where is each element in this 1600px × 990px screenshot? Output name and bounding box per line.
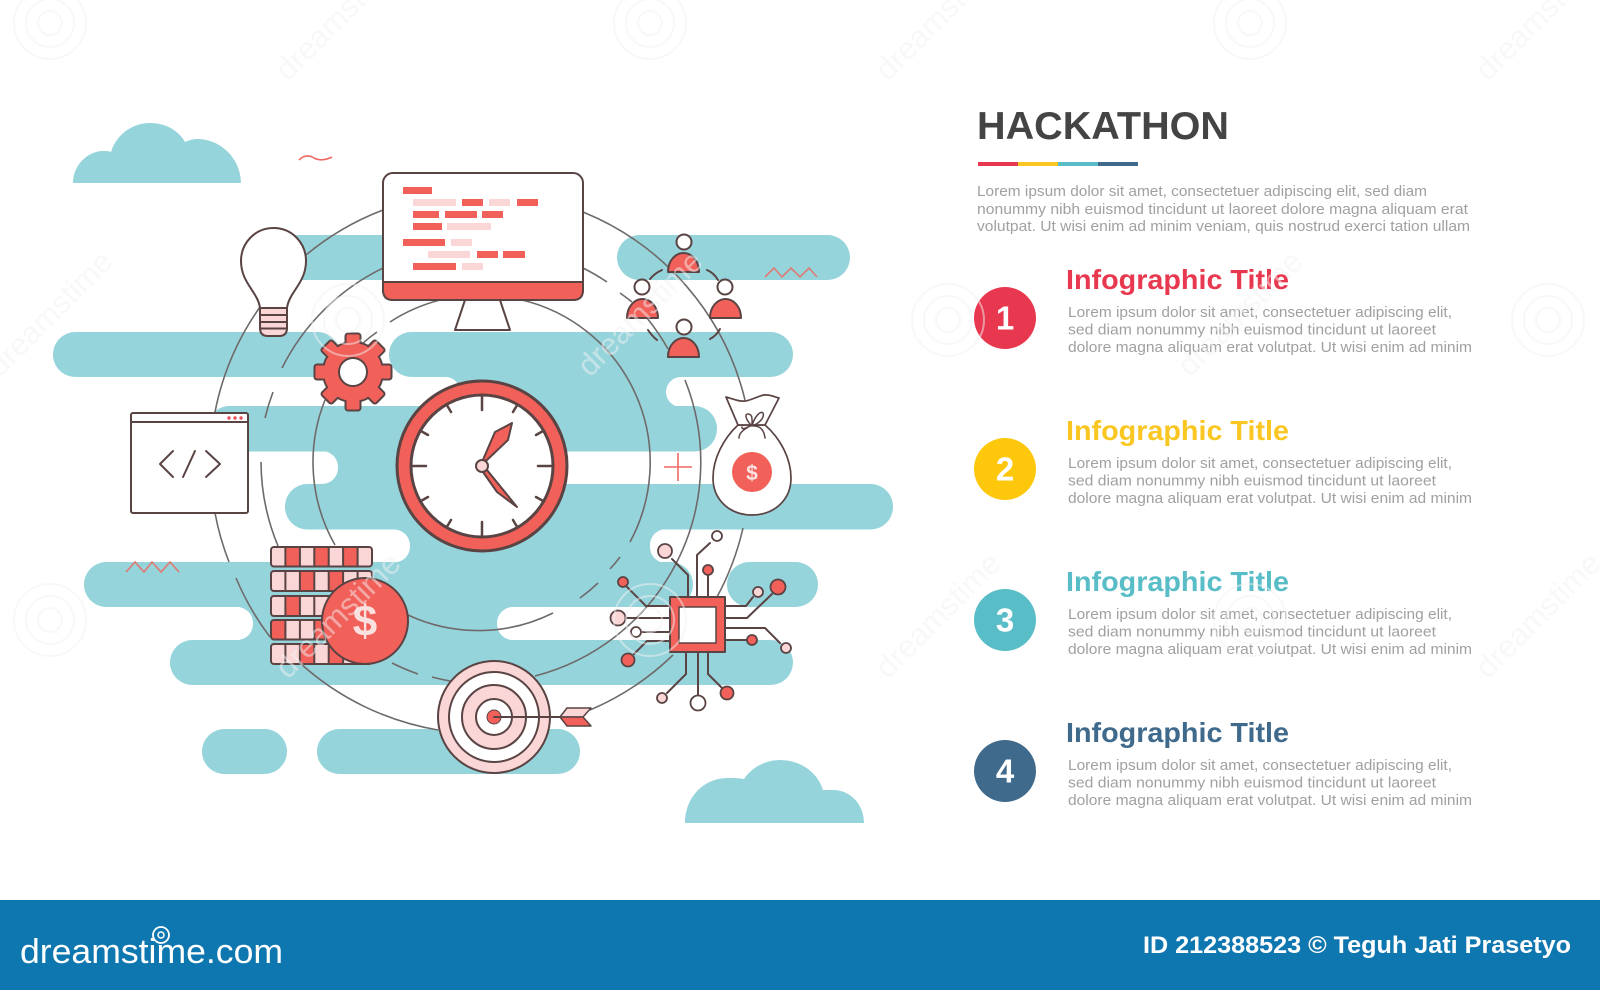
item title 2: Infographic Title xyxy=(1066,415,1289,446)
item text 3: dolore magna aliquam erat volutpat. Ut wisi enim ad minim xyxy=(1068,642,1472,658)
item text 1: Lorem ipsum dolor sit amet, consectetuer adipiscing elit, xyxy=(1068,305,1452,321)
number badge 2 xyxy=(974,438,1036,500)
list item 2 xyxy=(974,415,1472,507)
footer credit: ID 212388523 © Teguh Jati Prasetyo xyxy=(1143,932,1571,959)
intro paragraph xyxy=(977,184,1470,235)
item text 4 xyxy=(1068,758,1472,809)
item text 1: dolore magna aliquam erat volutpat. Ut wisi enim ad minim xyxy=(1068,340,1472,356)
icon: code window xyxy=(131,413,248,513)
intro paragraph: volutpat. Ut wisi enim ad minim veniam, quis nostrud exerci tation ullam xyxy=(977,219,1470,235)
icon: light bulb xyxy=(241,228,306,336)
icon: team network xyxy=(627,234,741,357)
list item 3 xyxy=(974,566,1472,658)
icon: money bag: $ xyxy=(746,462,758,485)
zigzag accent top right xyxy=(765,268,817,277)
item title 3: Infographic Title xyxy=(1066,566,1289,597)
infographic canvas: dreamstime xyxy=(570,244,709,383)
cloud bottom right xyxy=(685,760,864,823)
heading colour bar xyxy=(978,162,1138,166)
squiggle accent xyxy=(299,156,332,160)
number badge 4: 4 xyxy=(996,752,1015,790)
icon: coin stack xyxy=(271,547,408,664)
icon: gear xyxy=(314,334,392,410)
number badge 3 xyxy=(974,589,1036,651)
item text 1: sed diam nonummy nibh euismod tincidunt ut laoreet xyxy=(1068,322,1436,338)
cloud top left xyxy=(73,123,241,183)
item text 3: sed diam nonummy nibh euismod tincidunt ut laoreet xyxy=(1068,624,1436,640)
icon: money bag xyxy=(713,395,791,515)
list item 1 xyxy=(974,264,1472,356)
infographic canvas: dreamstime xyxy=(1170,244,1309,383)
item text 4: Lorem ipsum dolor sit amet, consectetuer adipiscing elit, xyxy=(1068,758,1452,774)
list item 4 xyxy=(974,717,1472,809)
concentric orbit rings xyxy=(215,210,745,730)
icon: coin stack: $ xyxy=(353,597,377,646)
item title 4: Infographic Title xyxy=(1066,717,1289,748)
number badge 1: 1 xyxy=(996,300,1014,336)
icon: clock xyxy=(397,381,567,551)
footer bar xyxy=(0,900,1600,990)
zigzag accent left xyxy=(126,562,179,572)
item text 3 xyxy=(1068,607,1472,658)
item text 2: dolore magna aliquam erat volutpat. Ut wisi enim ad minim xyxy=(1068,491,1472,507)
item text 4: dolore magna aliquam erat volutpat. Ut wisi enim ad minim xyxy=(1068,793,1472,809)
heading: HACKATHON xyxy=(977,105,1229,148)
background: teal stripes xyxy=(53,235,893,774)
item text 2 xyxy=(1068,456,1472,507)
item text 2: sed diam nonummy nibh euismod tincidunt ut laoreet xyxy=(1068,474,1436,490)
icon: microchip xyxy=(610,531,791,710)
item text 1 xyxy=(1068,305,1472,356)
intro paragraph: Lorem ipsum dolor sit amet, consectetuer adipiscing elit, sed diam xyxy=(977,184,1427,200)
footer logo: dreamstime.com xyxy=(20,933,283,971)
infographic canvas: dreamstime xyxy=(868,546,1007,685)
icon: target with arrow xyxy=(438,661,591,773)
number badge 3: 3 xyxy=(996,602,1014,638)
item title 1: Infographic Title xyxy=(1066,264,1289,295)
item text 3: Lorem ipsum dolor sit amet, consectetuer adipiscing elit, xyxy=(1068,607,1452,623)
number badge 2: 2 xyxy=(996,450,1014,488)
infographic canvas: dreamstime xyxy=(268,546,407,685)
plus accent xyxy=(664,453,692,481)
icon: monitor with code xyxy=(383,173,583,330)
number badge 4 xyxy=(974,740,1036,802)
item text 4: sed diam nonummy nibh euismod tincidunt ut laoreet xyxy=(1068,776,1436,792)
intro paragraph: nonummy nibh euismod tincidunt ut laoreet dolore magna aliquam erat xyxy=(977,202,1468,218)
item text 2: Lorem ipsum dolor sit amet, consectetuer adipiscing elit, xyxy=(1068,456,1452,472)
number badge 1 xyxy=(974,287,1036,349)
